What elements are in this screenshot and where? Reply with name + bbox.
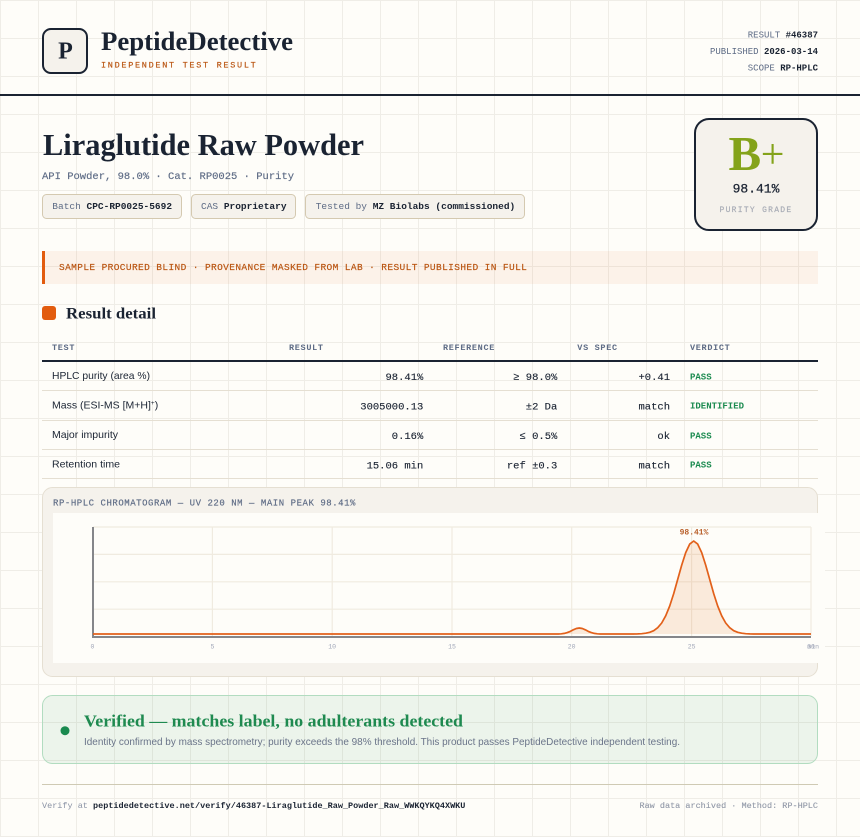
row: HPLC purity [52,370,712,384]
results table [42,343,818,479]
x axis labels: 20 [568,644,576,650]
row: major impurity: 0.16% [392,431,424,443]
table header: RESULT [289,343,324,353]
row: major impurity: ok [657,431,670,443]
row: mass [52,399,745,413]
logo mark [43,29,87,73]
grade caption: PURITY GRADE [720,206,792,215]
row: retention time: ref ±0.3 [507,460,557,472]
row: retention time: Retention time [52,458,120,470]
x axis labels: 5 [210,644,214,650]
chip: batch: Batch CPC-RP0025-5692 [52,201,172,212]
chip: tested by: Tested by MZ Biolabs (commissioned) [316,201,515,212]
callout body: Identity confirmed by mass spectrometry; purity exceeds the 98% threshold. This product passes PeptideDetective independent testing. [84,736,680,748]
product heading [42,127,524,218]
trace line [93,541,811,634]
x axis labels: min [807,644,819,650]
result metadata: SCOPE RP-HPLC [748,64,819,74]
table header: VS SPEC [577,343,618,353]
chromatogram panel [42,488,825,676]
x axis labels: 25 [688,644,696,650]
row: mass: Mass (ESI-MS [M+H] [52,399,151,411]
row: HPLC purity: PASS [690,372,712,382]
row: retention time [52,458,712,472]
row: major impurity: Major impurity [52,429,119,441]
logo mark: P [58,39,73,65]
table header: VERDICT [690,343,730,353]
result metadata [710,30,819,74]
x axis labels: 0 [91,644,95,650]
section heading: Result detail [66,306,157,323]
chip: tested by [306,194,524,218]
row: mass: ) [155,399,158,411]
row: mass: IDENTIFIED [690,402,745,412]
row: major impurity: ≤ 0.5% [519,431,558,443]
brand name: PeptideDetective [101,27,293,56]
row: major impurity: PASS [690,432,712,442]
chip: batch [42,194,182,218]
x axis labels: 15 [448,644,456,650]
row: retention time: 15.06 min [367,460,423,472]
brand tagline: INDEPENDENT TEST RESULT [101,61,257,71]
x axis labels [91,644,819,650]
peak fill [558,541,754,634]
table header: TEST [52,343,75,353]
row: mass: match [638,401,670,413]
row: HPLC purity: ≥ 98.0% [513,372,558,384]
grade badge [695,119,817,230]
row: mass: ±2 Da [526,401,557,413]
x axis labels: 10 [328,644,336,650]
status dot [60,726,70,735]
row: mass: + [151,400,155,407]
header [0,27,860,96]
row: HPLC purity: +0.41 [638,372,670,384]
row: major impurity [52,429,712,443]
result metadata: PUBLISHED 2026-03-14 [710,47,819,57]
product title: Liraglutide Raw Powder [43,127,364,162]
chart title: RP-HPLC CHROMATOGRAM — UV 220 NM — MAIN PEAK 98.41% [53,499,356,509]
archive note: Raw data archived · Method: RP-HPLC [639,801,818,811]
chip: CAS: CAS Proprietary [201,201,287,212]
row: HPLC purity: 98.41% [385,372,424,384]
row: mass: 3005000.13 [360,401,423,413]
blind sample notice [42,251,818,284]
line chart [91,527,819,650]
blind sample notice: SAMPLE PROCURED BLIND · PROVENANCE MASKED FROM LAB · RESULT PUBLISHED IN FULL [59,262,527,273]
result metadata: RESULT #46387 [748,30,818,40]
row: HPLC purity: HPLC purity (area %) [52,370,150,382]
verify link: Verify at peptidedetective.net/verify/46387-Liraglutide_Raw_Powder_Raw_WWKQYKQ4XWKU [42,801,465,811]
grade letter: B [728,126,761,181]
purity value: 98.41% [733,181,780,196]
footer [42,784,818,811]
x axis labels: 30 [807,644,815,650]
axes [93,527,811,637]
product subtitle: API Powder, 98.0% · Cat. RP0025 · Purity [42,171,294,183]
row: retention time: match [638,460,670,472]
chip: CAS [192,194,296,218]
grade letter: + [761,132,784,178]
table header: REFERENCE [443,343,495,353]
verified callout [42,696,818,764]
row: retention time: PASS [690,461,712,471]
table header [52,343,730,353]
peak label: 98.41% [680,529,709,538]
callout heading: Verified — matches label, no adulterants detected [84,712,464,731]
